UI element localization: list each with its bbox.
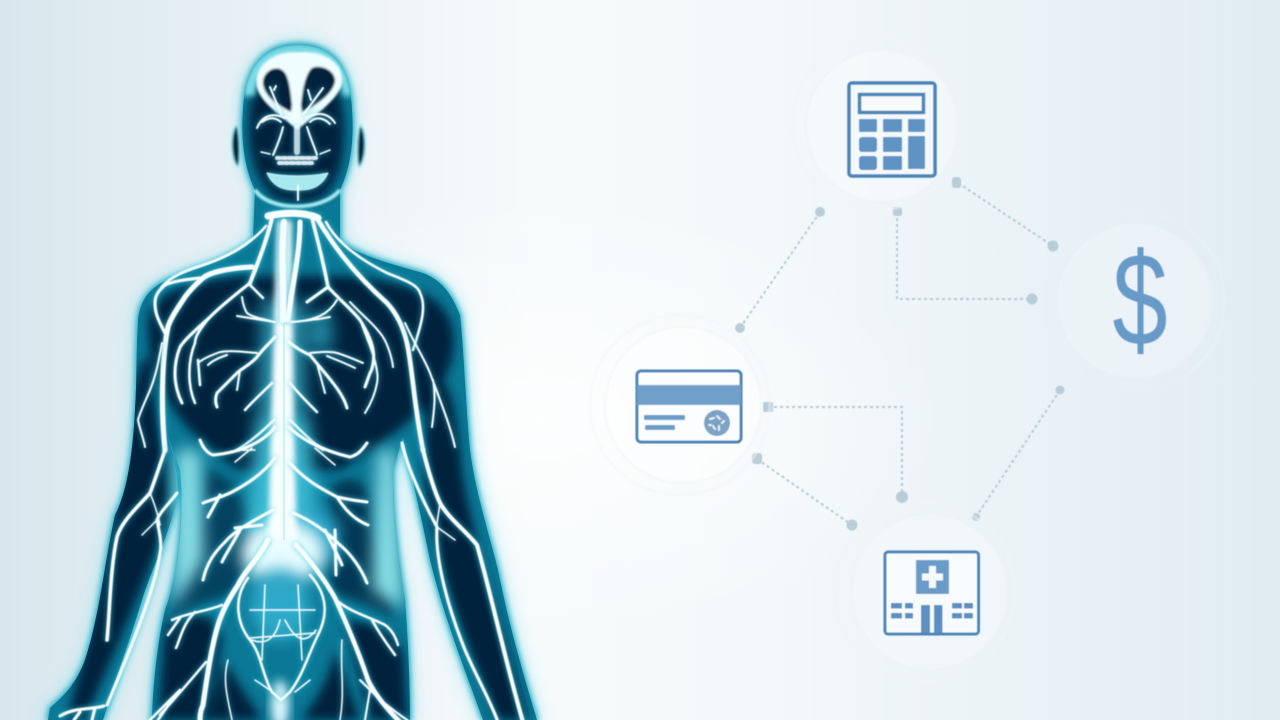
head cap band — [243, 44, 352, 96]
torso teal glow — [172, 300, 404, 610]
nerves: neck and shoulders — [155, 213, 423, 450]
chin glow — [255, 190, 340, 206]
glowing spine — [268, 220, 297, 540]
figure dark body — [30, 30, 550, 720]
halo ring — [1045, 211, 1225, 391]
nerves: pelvis and legs — [150, 540, 410, 720]
nerves: ribs — [200, 427, 368, 583]
halo ring — [590, 315, 770, 495]
icon: credit card — [637, 371, 741, 442]
node: dollar — [1045, 211, 1225, 391]
ears — [232, 125, 365, 167]
illustration: glowing human nervous system figure — [30, 30, 550, 720]
halo ring — [835, 502, 1015, 682]
nerves: face — [257, 86, 335, 200]
node: hospital — [835, 502, 1015, 682]
node: calculator — [792, 38, 964, 210]
nerves: left arm — [60, 450, 177, 720]
figure outer glow — [48, 44, 537, 720]
diagram: connecting dotted lines — [740, 183, 1060, 525]
halo ring — [792, 38, 964, 210]
icon: dollar sign: $ — [1112, 225, 1168, 373]
node: credit card — [590, 315, 770, 495]
pelvis glow — [241, 521, 325, 720]
nerves: chest — [138, 283, 455, 450]
nerves: right arm — [402, 443, 523, 720]
brain cap — [256, 52, 342, 130]
diagram: connector nodes — [735, 177, 1064, 530]
icon: hospital — [885, 552, 978, 634]
icon: calculator — [849, 83, 935, 176]
